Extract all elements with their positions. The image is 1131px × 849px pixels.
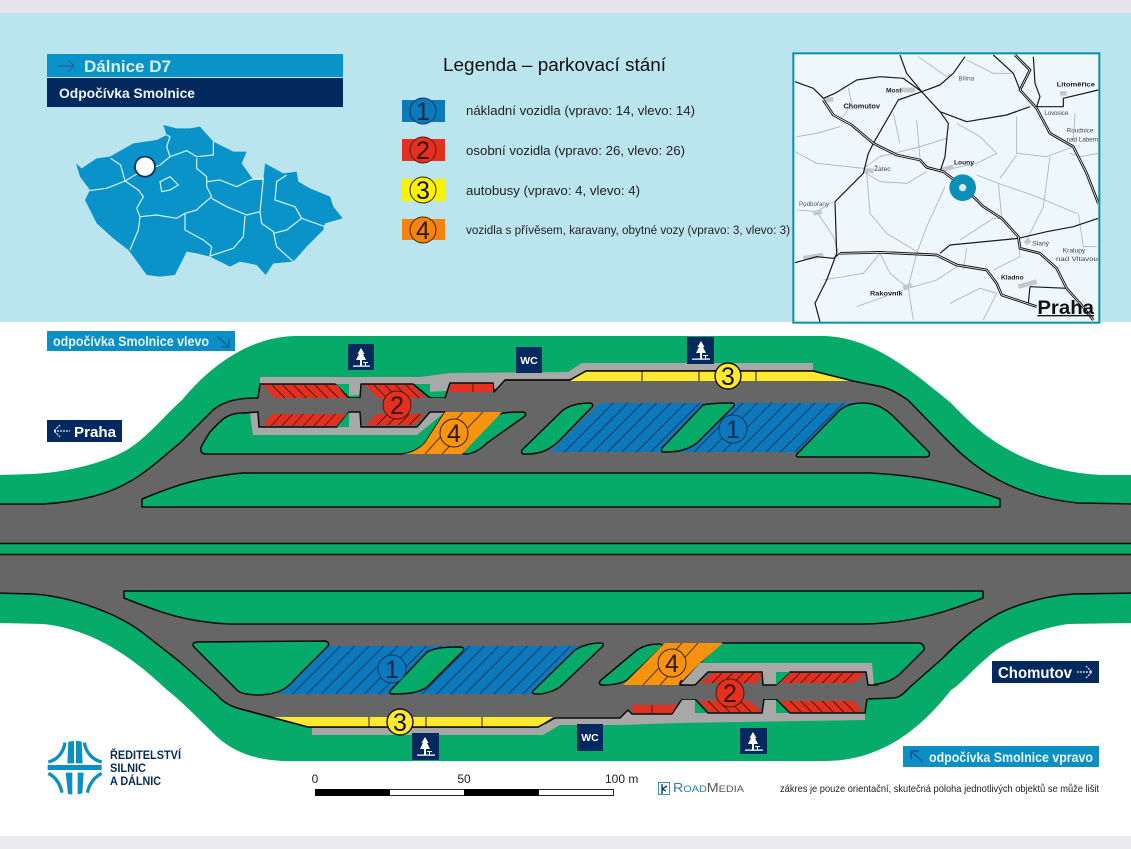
service walkway, lower bbox=[312, 700, 865, 735]
badge 3 bbox=[715, 363, 741, 391]
upper median island bbox=[142, 473, 1000, 507]
green patches bbox=[335, 384, 790, 713]
legend bbox=[402, 54, 790, 245]
map labels: Slaný bbox=[1032, 241, 1050, 248]
badge 2 bbox=[716, 679, 744, 708]
parking block bbox=[258, 398, 445, 427]
lower median island bbox=[124, 591, 983, 624]
map labels: Podbořany bbox=[799, 202, 829, 208]
logo text: ŘEDITELSTVÍ bbox=[110, 747, 182, 762]
badge 1 bbox=[719, 415, 747, 444]
bus parking bbox=[237, 708, 555, 727]
label: right rest area bbox=[903, 746, 1099, 767]
map labels: Most bbox=[886, 88, 902, 95]
icon: WC lower: WC bbox=[581, 732, 599, 744]
location marker bbox=[135, 157, 155, 177]
label: direction Praha bbox=[47, 420, 122, 442]
icon: picnic area upper left bbox=[348, 344, 374, 370]
truck parking bbox=[278, 646, 590, 694]
bottom strip bbox=[0, 836, 1131, 849]
badge 2 bbox=[383, 391, 411, 420]
icon: arrow bbox=[58, 60, 74, 72]
badge 4 bbox=[658, 649, 686, 678]
logo text bbox=[110, 747, 182, 788]
carriageway and slip roads bbox=[0, 371, 1131, 727]
truck parking bbox=[550, 403, 860, 452]
map: Czech regions bbox=[76, 125, 343, 277]
map labels: Kladno bbox=[1001, 275, 1024, 282]
badge 1: 1 bbox=[726, 416, 740, 444]
badge 3: 3 bbox=[721, 363, 735, 391]
logo mark bbox=[48, 741, 102, 795]
legend item 1: nákladní vozidla (vpravo: 14, vlevo: 14) bbox=[466, 104, 695, 118]
scale bar: 0 bbox=[312, 772, 319, 786]
disclaimer: zákres je pouze orientační, skutečná poloha jednotlivých objektů se může lišit bbox=[780, 783, 1099, 795]
label: direction Praha: Praha bbox=[74, 424, 117, 441]
icon: picnic area lower right bbox=[740, 728, 767, 754]
badge 1: 1 bbox=[385, 656, 399, 684]
legend item 3: 3 bbox=[416, 177, 430, 205]
green verge bbox=[0, 336, 1131, 761]
scale bar: 50 bbox=[457, 772, 471, 786]
walkway around car parking bbox=[250, 412, 445, 435]
label: direction Chomutov bbox=[992, 661, 1099, 683]
label: right rest area: odpočívka Smolnice vpravo bbox=[929, 749, 1093, 765]
logo text: A DÁLNIC bbox=[110, 773, 161, 788]
upper rest area bbox=[201, 363, 930, 457]
map labels: Roudnice bbox=[1067, 128, 1094, 135]
heading text: Odpočívka Smolnice: Odpočívka Smolnice bbox=[59, 85, 195, 101]
car parking bbox=[632, 673, 865, 713]
legend title: Legenda – parkovací stání bbox=[443, 54, 667, 75]
legend item 4: vozidla s přívěsem, karavany, obytné vozy (vpravo: 3, vlevo: 3) bbox=[466, 223, 790, 237]
badge 3: 3 bbox=[393, 709, 407, 737]
map labels: Rakovník bbox=[870, 291, 903, 298]
legend item 2 bbox=[402, 137, 685, 165]
panel: light blue header bbox=[0, 13, 1131, 322]
icon: picnic area upper right bbox=[687, 337, 714, 364]
walkway around car parking bbox=[680, 663, 874, 685]
central median bbox=[0, 544, 1131, 554]
map labels: Praha bbox=[1037, 298, 1094, 319]
parking block bbox=[682, 672, 868, 699]
label: direction Chomutov: Chomutov bbox=[998, 665, 1072, 682]
islands bbox=[201, 403, 930, 457]
label: left rest area bbox=[47, 331, 235, 351]
map labels: Bílina bbox=[958, 75, 975, 82]
trailer parking bbox=[403, 412, 502, 454]
map: location inset bbox=[793, 53, 1099, 323]
icon: picnic area lower left bbox=[412, 733, 439, 760]
badge 4 bbox=[440, 419, 468, 448]
map labels: Lovosice bbox=[1044, 111, 1069, 117]
badge 1 bbox=[378, 655, 406, 684]
map labels: Žatec bbox=[874, 164, 891, 173]
label: left rest area: odpočívka Smolnice vlevo bbox=[53, 334, 209, 349]
map labels: Chomutov bbox=[843, 103, 880, 110]
legend item 4: 4 bbox=[416, 217, 430, 245]
car parking bbox=[263, 384, 493, 426]
road layout plan bbox=[0, 336, 1131, 761]
logo text: SILNIC bbox=[110, 761, 146, 775]
logo: RoadMedia: ROADMEDIA bbox=[673, 781, 745, 795]
scale bar bbox=[312, 772, 638, 796]
badge 4: 4 bbox=[665, 650, 679, 678]
legend item 3: autobusy (vpravo: 4, vlevo: 4) bbox=[466, 184, 640, 198]
legend item 1 bbox=[402, 98, 695, 126]
legend item 3 bbox=[402, 177, 640, 205]
map labels: Kralupy bbox=[1063, 248, 1086, 255]
legend item 1: 1 bbox=[416, 98, 430, 126]
map labels: Litoměřice bbox=[1057, 82, 1095, 89]
trailer parking bbox=[623, 643, 723, 685]
map labels: nad Labem bbox=[1067, 137, 1098, 144]
badge 2: 2 bbox=[390, 392, 404, 420]
islands bbox=[193, 641, 924, 695]
map labels: nad Vltavou bbox=[1056, 256, 1098, 263]
icon: WC lower bbox=[577, 724, 603, 751]
icon: WC upper: WC bbox=[520, 355, 538, 367]
legend item 2: 2 bbox=[416, 137, 430, 165]
icon: WC upper bbox=[516, 347, 542, 373]
heading text: Dálnice D7: Dálnice D7 bbox=[84, 58, 171, 76]
logo: RSD bbox=[48, 741, 182, 795]
map labels: Louny bbox=[954, 159, 974, 166]
heading: motorway and rest area bbox=[47, 54, 343, 107]
bus parking bbox=[505, 371, 853, 381]
scale bar: 100 m bbox=[605, 772, 638, 786]
top strip bbox=[0, 0, 1131, 13]
badge 2: 2 bbox=[723, 680, 737, 708]
legend item 4 bbox=[402, 217, 790, 245]
service walkway, upper bbox=[260, 363, 813, 400]
badge 3 bbox=[387, 709, 413, 737]
badge 4: 4 bbox=[447, 420, 461, 448]
icon: location ring bbox=[949, 174, 976, 201]
legend item 2: osobní vozidla (vpravo: 26, vlevo: 26) bbox=[466, 144, 685, 158]
lower rest area bbox=[193, 641, 924, 737]
map labels bbox=[799, 75, 1098, 319]
